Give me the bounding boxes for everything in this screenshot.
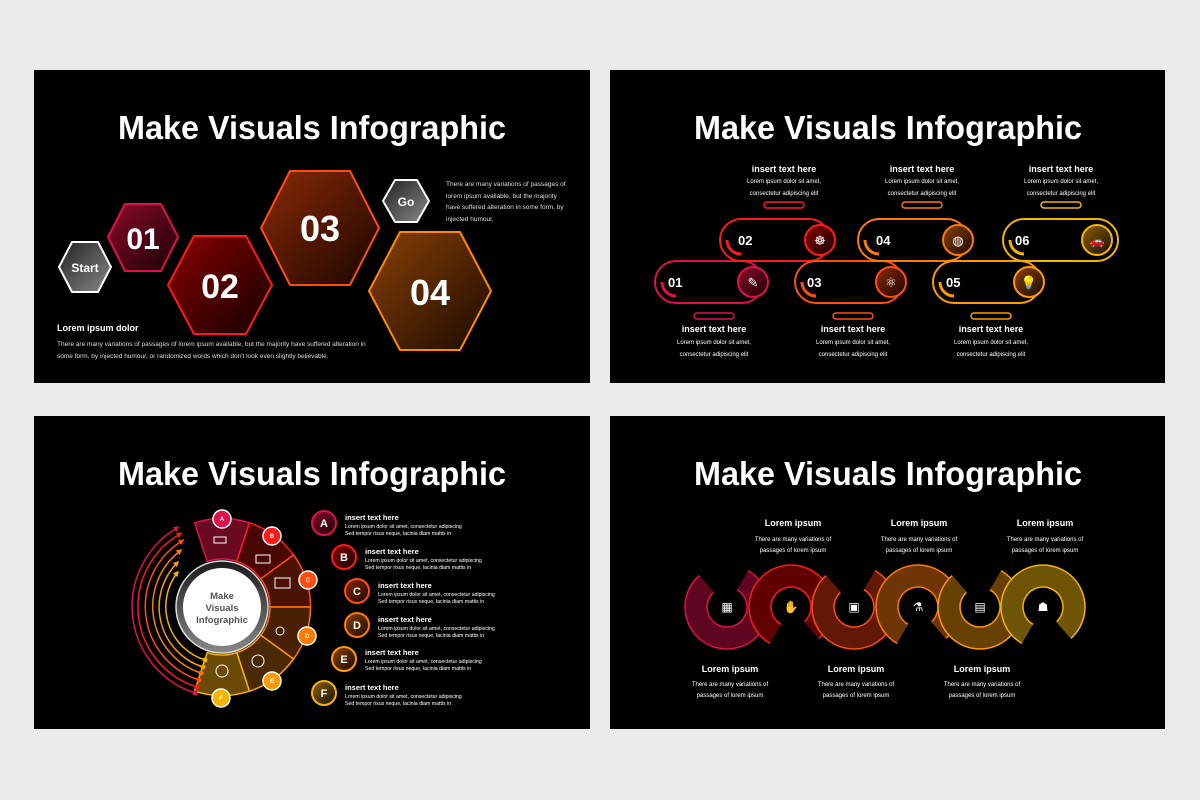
- labels top: There are many variations of: [881, 537, 958, 543]
- step 06: [1003, 219, 1118, 261]
- list A-F: Sed tempor risus neque, lacinia diam mattis in: [345, 531, 451, 537]
- title: Make Visuals Infographic: [694, 455, 1082, 492]
- text block: lorem ipsum dolor: Lorem ipsum dolor: [57, 323, 139, 333]
- labels bottom: There are many variations of: [692, 682, 769, 688]
- list A-F: Sed tempor risus neque, lacinia diam mattis in: [365, 565, 471, 571]
- step 04: [858, 219, 973, 261]
- labels top: insert text here: [1029, 164, 1093, 174]
- list A-F: Sed tempor risus neque, lacinia diam mattis in: [345, 701, 451, 707]
- icons: ▦: [721, 600, 733, 614]
- list A-F: Lorem ipsum dolor sit amet, consectetur adipiscing: [378, 592, 495, 598]
- chart: radial sectors: Make: [210, 591, 234, 602]
- list A-F: insert text here: [378, 615, 432, 624]
- panel: hexagon steps: [34, 70, 590, 383]
- list A-F: C: [353, 586, 361, 598]
- step 05: 05: [946, 275, 960, 290]
- labels bottom: Lorem ipsum: [702, 664, 758, 674]
- labels bottom: Lorem ipsum dolor sit amet,: [816, 340, 890, 346]
- icons: ▤: [974, 600, 986, 614]
- labels top: consectetur adipiscing elit: [888, 191, 957, 197]
- step 03: ⚛: [885, 275, 897, 290]
- hexagon: 02: 02: [201, 268, 239, 306]
- labels bottom: Lorem ipsum dolor sit amet,: [677, 340, 751, 346]
- title: Make Visuals Infographic: [118, 109, 506, 146]
- chart: rings: [670, 550, 1100, 664]
- hexagon: Go: Go: [398, 195, 414, 209]
- step 01: 01: [668, 275, 682, 290]
- hexagon: 03: [261, 171, 379, 285]
- step 03: [795, 261, 906, 303]
- labels top: There are many variations of: [755, 537, 832, 543]
- step 04: ◍: [952, 233, 964, 248]
- labels top: passages of lorem ipsum: [760, 548, 826, 554]
- list A-F: Sed tempor risus neque, lacinia diam mattis in: [378, 599, 484, 605]
- hexagon: Start: [59, 242, 111, 292]
- panel: loop timeline: [610, 70, 1165, 383]
- hexagon: 03: 03: [300, 208, 340, 249]
- text block: right: [446, 181, 566, 223]
- step 06: 06: [1015, 233, 1029, 248]
- list A-F: insert text here: [365, 648, 419, 657]
- labels bottom: Lorem ipsum dolor sit amet,: [954, 340, 1028, 346]
- icons: ⚗: [913, 600, 924, 614]
- text block: right: lorem ipsum available, but the majority: [446, 193, 558, 200]
- icons: [721, 600, 1048, 614]
- labels top: [747, 164, 1098, 208]
- labels bottom: passages of lorem ipsum: [697, 693, 763, 699]
- labels bottom: There are many variations of: [944, 682, 1021, 688]
- labels bottom: [692, 664, 1021, 699]
- step 03: 03: [807, 275, 821, 290]
- labels top: Lorem ipsum dolor sit amet,: [747, 179, 821, 185]
- step 01: [655, 261, 768, 303]
- text block: lorem ipsum dolor: some form, by injected humour, or randomized words which don't look even slightly believable.: [57, 353, 329, 360]
- labels top: consectetur adipiscing elit: [1027, 191, 1096, 197]
- panel: chain rings: [610, 416, 1165, 729]
- hexagon: Start: Start: [71, 261, 99, 275]
- labels bottom: There are many variations of: [818, 682, 895, 688]
- step 02: [720, 219, 835, 261]
- list A-F: Sed tempor risus neque, lacinia diam mattis in: [378, 633, 484, 639]
- list A-F: D: [353, 620, 361, 632]
- labels bottom: consectetur adipiscing elit: [819, 352, 888, 358]
- list A-F: A: [320, 518, 328, 530]
- labels top: passages of lorem ipsum: [886, 548, 952, 554]
- chart: radial sectors: E: [270, 679, 274, 685]
- hexagon: 04: 04: [410, 272, 450, 313]
- labels top: Lorem ipsum dolor sit amet,: [885, 179, 959, 185]
- chart: radial sectors: D: [305, 634, 310, 640]
- list A-F: [312, 511, 495, 707]
- list A-F: insert text here: [345, 683, 399, 692]
- title: Make Visuals Infographic: [694, 109, 1082, 146]
- chart: radial sectors: [132, 510, 317, 707]
- labels top: There are many variations of: [1007, 537, 1084, 543]
- step 01: ✎: [748, 275, 758, 290]
- icons: ✋: [784, 600, 798, 614]
- labels bottom: insert text here: [821, 324, 885, 334]
- text block: lorem ipsum dolor: There are many variations of passages of lorem ipsum available, but the majority have suffered alteration in: [57, 341, 366, 348]
- hexagon: 02: [168, 236, 272, 334]
- list A-F: insert text here: [345, 513, 399, 522]
- list A-F: E: [340, 654, 348, 666]
- list A-F: Lorem ipsum dolor sit amet, consectetur adipiscing: [378, 626, 495, 632]
- chart: radial sectors: A: [220, 517, 225, 523]
- text block: right: injected humour,: [446, 216, 494, 223]
- labels bottom: consectetur adipiscing elit: [680, 352, 749, 358]
- hexagon: Go: [383, 180, 429, 222]
- labels bottom: insert text here: [682, 324, 746, 334]
- text block: lorem ipsum dolor: [57, 323, 366, 360]
- labels top: Lorem ipsum: [1017, 518, 1073, 528]
- list A-F: F: [321, 688, 328, 700]
- labels bottom: [677, 313, 1028, 358]
- list A-F: B: [340, 552, 348, 564]
- labels top: passages of lorem ipsum: [1012, 548, 1078, 554]
- labels top: [755, 518, 1084, 554]
- labels top: Lorem ipsum: [891, 518, 947, 528]
- chart: radial sectors: C: [306, 578, 311, 584]
- list A-F: insert text here: [365, 547, 419, 556]
- panel: radial diagram: [34, 416, 590, 729]
- step 05: [933, 261, 1044, 303]
- labels bottom: insert text here: [959, 324, 1023, 334]
- labels bottom: passages of lorem ipsum: [823, 693, 889, 699]
- text block: right: There are many variations of passages of: [446, 181, 566, 188]
- chart: radial sectors: Visuals: [205, 603, 239, 614]
- labels top: consectetur adipiscing elit: [750, 191, 819, 197]
- chart: radial sectors: Infographic: [196, 615, 248, 626]
- title: Make Visuals Infographic: [118, 455, 506, 492]
- labels bottom: consectetur adipiscing elit: [957, 352, 1026, 358]
- sector labels: [212, 510, 317, 707]
- step 05: 💡: [1021, 275, 1037, 290]
- text block: right: have suffered alteration in some form, by: [446, 204, 564, 211]
- list A-F: Lorem ipsum dolor sit amet, consectetur adipiscing: [365, 659, 482, 665]
- labels top: insert text here: [752, 164, 816, 174]
- arrows: arcs: [132, 528, 205, 693]
- hexagon: 04: [369, 232, 491, 350]
- hexagon: 01: [108, 204, 178, 271]
- icons: ☗: [1038, 600, 1048, 614]
- step 06: 🚗: [1090, 234, 1105, 248]
- labels top: Lorem ipsum dolor sit amet,: [1024, 179, 1098, 185]
- list A-F: Lorem ipsum dolor sit amet, consectetur adipiscing: [345, 524, 462, 530]
- step 04: 04: [876, 233, 891, 248]
- list A-F: Lorem ipsum dolor sit amet, consectetur adipiscing: [345, 694, 462, 700]
- hexagon: 01: 01: [126, 223, 160, 256]
- labels top: Lorem ipsum: [765, 518, 821, 528]
- labels bottom: Lorem ipsum: [954, 664, 1010, 674]
- labels top: insert text here: [890, 164, 954, 174]
- list A-F: Lorem ipsum dolor sit amet, consectetur adipiscing: [365, 558, 482, 564]
- chart: radial sectors: B: [270, 534, 275, 540]
- labels bottom: passages of lorem ipsum: [949, 693, 1015, 699]
- labels bottom: Lorem ipsum: [828, 664, 884, 674]
- icons: ▣: [848, 600, 860, 614]
- step 02: ☸: [814, 233, 826, 248]
- chart: radial sectors: F: [219, 696, 223, 702]
- step 02: 02: [738, 233, 752, 248]
- list A-F: insert text here: [378, 581, 432, 590]
- list A-F: Sed tempor risus neque, lacinia diam mattis in: [365, 666, 471, 672]
